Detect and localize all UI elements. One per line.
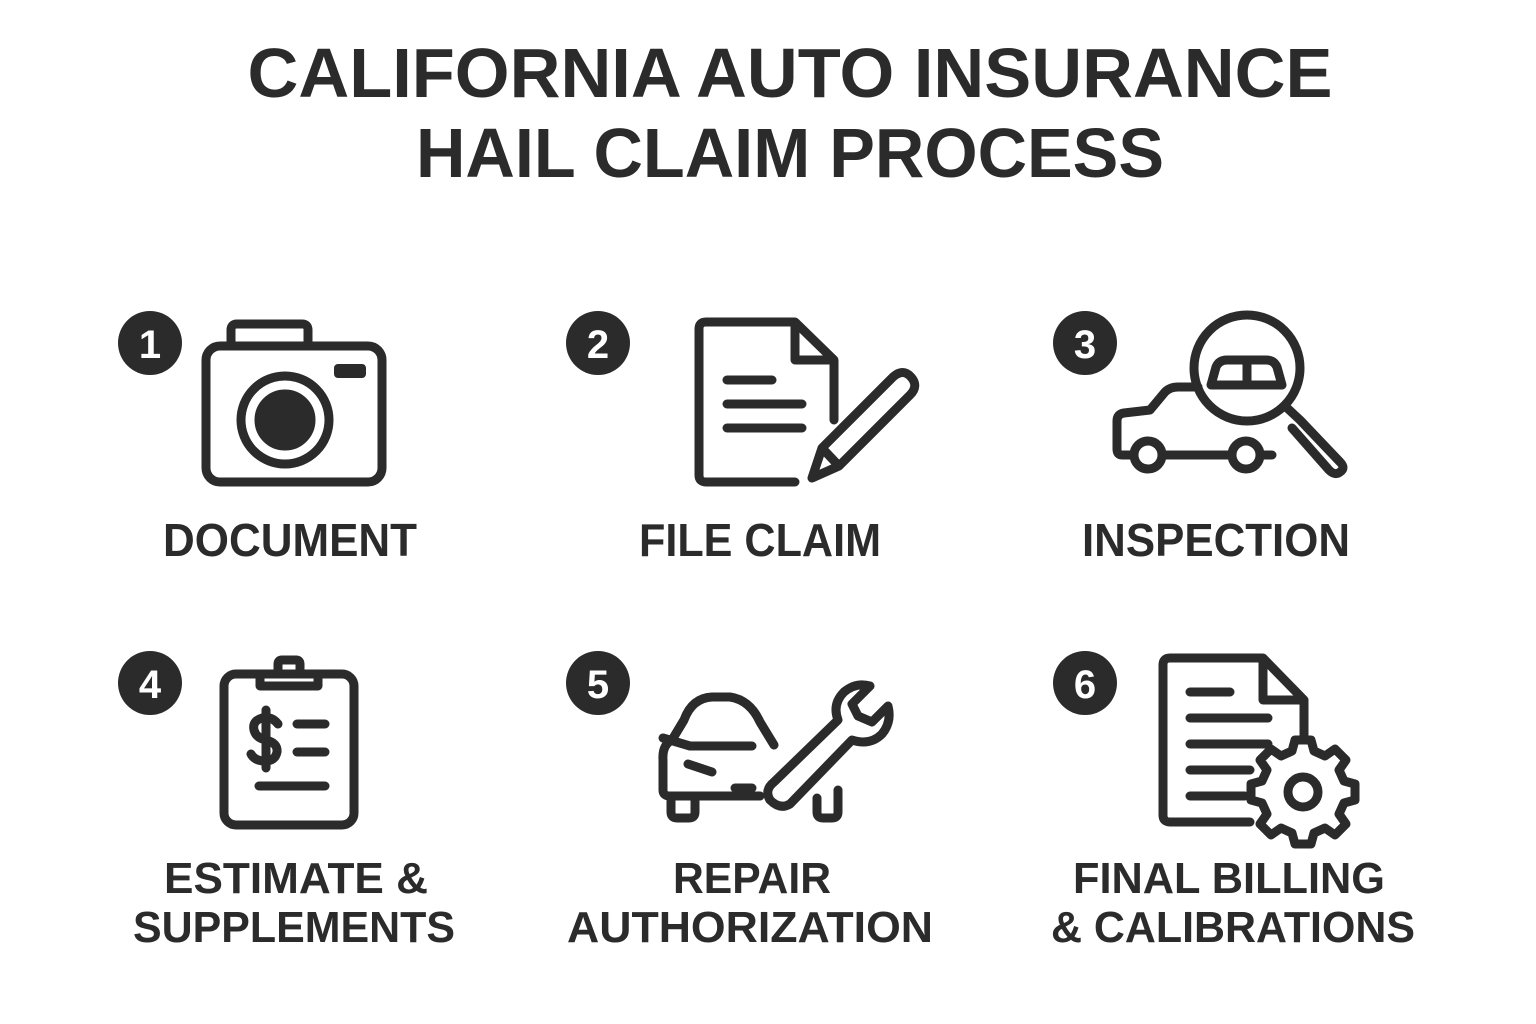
badge 5 [566,651,630,715]
label: repair authorization: REPAIR [673,854,831,903]
label: final billing & calibrations: FINAL BILLING [1073,854,1385,903]
icon: camera [206,324,382,482]
panel: step 2 file claim [566,311,915,566]
badge 1: 1 [139,323,161,367]
panel: step 5 repair authorization [566,651,933,952]
label: document: DOCUMENT [163,514,417,566]
label: repair authorization [567,854,933,952]
title: CALIFORNIA AUTO INSURANCE [248,34,1332,112]
badge 6 [1053,651,1117,715]
label: estimate & supplements [133,854,455,952]
icon: car with magnifier [1117,315,1343,474]
label: estimate & supplements: ESTIMATE & [164,854,428,903]
label: file claim: FILE CLAIM [639,514,881,566]
title [248,34,1332,192]
badge 2 [566,311,630,375]
panel: step 3 inspection [1053,311,1350,566]
icon: car with wrench [663,685,889,818]
label: inspection: INSPECTION [1082,514,1350,566]
badge 5: 5 [587,663,609,707]
icon: document with pencil [699,322,915,482]
panel: step 1 document [118,311,417,566]
label: estimate & supplements: SUPPLEMENTS [133,903,455,952]
panel: step 4 estimate [118,651,455,952]
badge 3: 3 [1074,323,1096,367]
icon: document with gear [1163,658,1355,844]
badge 4 [118,651,182,715]
badge 3 [1053,311,1117,375]
badge 2: 2 [587,323,609,367]
badge 1 [118,311,182,375]
title: HAIL CLAIM PROCESS [416,114,1164,192]
badge 4: 4 [139,663,162,707]
label: final billing & calibrations [1051,854,1415,952]
icon: clipboard with dollar [224,660,354,825]
badge 6: 6 [1074,663,1096,707]
label: repair authorization: AUTHORIZATION [567,903,933,952]
panel: step 6 final billing [1051,651,1415,952]
label: final billing & calibrations: & CALIBRATIONS [1051,903,1415,952]
